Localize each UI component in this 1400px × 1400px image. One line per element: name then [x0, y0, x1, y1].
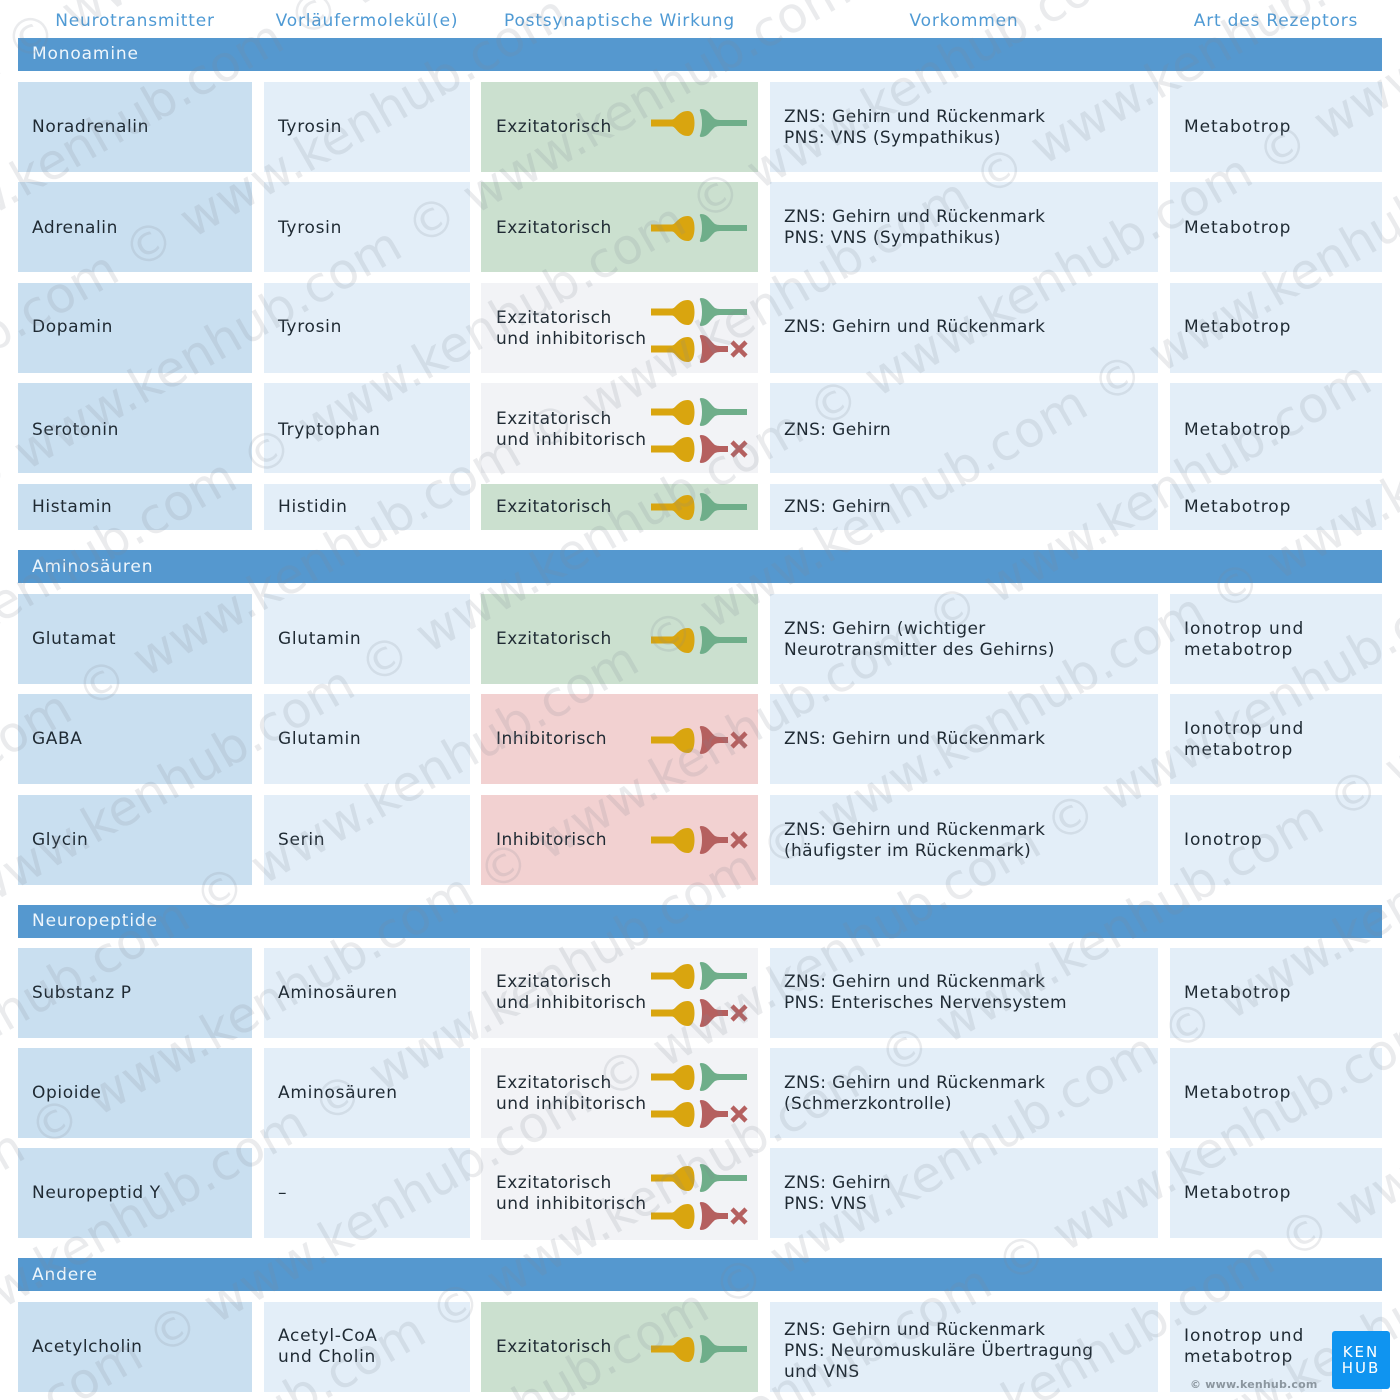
row: Substanz P: ZNS: Gehirn und Rückenmark [784, 972, 1045, 992]
effect: excitatory and inhibitory [481, 1148, 758, 1240]
row: Serotonin: ZNS: Gehirn [784, 420, 891, 440]
row: GABA: Glutamin [278, 728, 361, 748]
effect: excitatory and inhibitory: und inhibitorisch [496, 430, 647, 450]
row: Adrenalin: Tyrosin [278, 218, 342, 238]
row: Glutamat: metabotrop [1184, 640, 1293, 660]
row: Serotonin: Serotonin [32, 420, 119, 440]
row: Serotonin [18, 383, 1382, 473]
row: Serotonin: Metabotrop [1184, 420, 1291, 440]
row: Histamin [18, 484, 1382, 530]
effect: excitatory and inhibitory [481, 1048, 758, 1138]
section band: Monoamine: Monoamine [32, 44, 139, 64]
row: Dopamin: Metabotrop [1184, 316, 1291, 336]
row: Glutamat: Glutamin [278, 628, 361, 648]
effect: excitatory and inhibitory: Exzitatorisch [496, 409, 612, 429]
row: GABA: ZNS: Gehirn und Rückenmark [784, 728, 1045, 748]
effect: excitatory and inhibitory: Exzitatorisch [496, 972, 612, 992]
row: Opioide [18, 1048, 1382, 1138]
effect: inhibitory [481, 694, 758, 784]
row: Opioide: Metabotrop [1184, 1082, 1291, 1102]
row: Substanz P: PNS: Enterisches Nervensystem [784, 993, 1067, 1013]
effect: excitatory and inhibitory: und inhibitorisch [496, 993, 647, 1013]
row: Dopamin: ZNS: Gehirn und Rückenmark [784, 316, 1045, 336]
row: Noradrenalin: Noradrenalin [32, 116, 149, 136]
effect: inhibitory: Inhibitorisch [496, 830, 607, 850]
effect: excitatory [481, 484, 758, 530]
row: Opioide: Opioide [32, 1082, 101, 1102]
copyright note: © www.kenhub.com [1190, 1378, 1318, 1391]
row: GABA: Ionotrop und [1184, 719, 1304, 739]
row: Noradrenalin: PNS: VNS (Sympathikus) [784, 128, 1001, 148]
logo: Kenhub: KEN [1343, 1343, 1379, 1361]
section band: Andere [18, 1258, 1382, 1291]
section band: Monoamine [18, 38, 1382, 71]
row: Serotonin: Tryptophan [278, 420, 381, 440]
column heading: Postsynaptische Wirkung: Postsynaptische Wirkung [504, 11, 735, 31]
row: Substanz P [18, 948, 1382, 1038]
effect: excitatory and inhibitory: und inhibitorisch [496, 329, 647, 349]
effect: inhibitory [481, 795, 758, 885]
row: Histamin: Metabotrop [1184, 496, 1291, 516]
row: Noradrenalin: Metabotrop [1184, 116, 1291, 136]
logo: Kenhub [1332, 1331, 1390, 1389]
row: Glutamat: Glutamat [32, 628, 116, 648]
row: Glutamat: Ionotrop und [1184, 619, 1304, 639]
row: Glycin [18, 795, 1382, 885]
effect: excitatory and inhibitory: Exzitatorisch [496, 1173, 612, 1193]
row: Noradrenalin [18, 82, 1382, 172]
row: GABA: GABA [32, 728, 82, 748]
effect: excitatory [481, 1302, 758, 1392]
row: Acetylcholin: metabotrop [1184, 1347, 1293, 1367]
column heading: Vorläufermolekül(e): Vorläufermolekül(e) [276, 11, 458, 31]
row: Neuropeptid Y: PNS: VNS [784, 1194, 867, 1214]
row: Glutamat [18, 594, 1382, 684]
row: Substanz P: Aminosäuren [278, 982, 398, 1002]
row: Glycin: Ionotrop [1184, 830, 1263, 850]
row: Adrenalin: Metabotrop [1184, 218, 1291, 238]
effect: excitatory and inhibitory [481, 283, 758, 373]
row: Noradrenalin: Tyrosin [278, 116, 342, 136]
section band: Aminosäuren: Aminosäuren [32, 557, 153, 577]
row: Opioide: ZNS: Gehirn und Rückenmark [784, 1073, 1045, 1093]
row: Neuropeptid Y: Neuropeptid Y [32, 1182, 161, 1202]
effect: excitatory [481, 82, 758, 172]
effect: excitatory [481, 182, 758, 272]
row: Dopamin [18, 283, 1382, 373]
row: Neuropeptid Y: – [278, 1182, 287, 1202]
column heading: Art des Rezeptors: Art des Rezeptors [1194, 11, 1358, 31]
effect: excitatory and inhibitory: Exzitatorisch [496, 1073, 612, 1093]
row: Histamin: Histamin [32, 496, 112, 516]
row: Glycin: (häufigster im Rückenmark) [784, 841, 1031, 861]
row: Acetylcholin: ZNS: Gehirn und Rückenmark [784, 1320, 1045, 1340]
row: Noradrenalin: ZNS: Gehirn und Rückenmark [784, 107, 1045, 127]
row: Neuropeptid Y: Metabotrop [1184, 1182, 1291, 1202]
effect: inhibitory: Inhibitorisch [496, 728, 607, 748]
row: Acetylcholin: Acetylcholin [32, 1336, 143, 1356]
row: Adrenalin: ZNS: Gehirn und Rückenmark [784, 207, 1045, 227]
row: Substanz P: Metabotrop [1184, 982, 1291, 1002]
effect: excitatory and inhibitory [481, 383, 758, 473]
row: Opioide: (Schmerzkontrolle) [784, 1094, 952, 1114]
row: Dopamin: Dopamin [32, 316, 113, 336]
row: Histamin: Histidin [278, 496, 348, 516]
effect: excitatory: Exzitatorisch [496, 496, 612, 516]
row: Dopamin: Tyrosin [278, 316, 342, 336]
column heading: Vorkommen: Vorkommen [910, 11, 1018, 31]
row: GABA: metabotrop [1184, 740, 1293, 760]
row: Substanz P: Substanz P [32, 982, 132, 1002]
section band: Aminosäuren [18, 550, 1382, 583]
row: Adrenalin: PNS: VNS (Sympathikus) [784, 228, 1001, 248]
logo: Kenhub: HUB [1342, 1359, 1380, 1377]
row: Neuropeptid Y: ZNS: Gehirn [784, 1173, 891, 1193]
effect: excitatory: Exzitatorisch [496, 628, 612, 648]
row: Glutamat: ZNS: Gehirn (wichtiger [784, 619, 986, 639]
row: Glutamat: Neurotransmitter des Gehirns) [784, 640, 1055, 660]
row: Acetylcholin: Ionotrop und [1184, 1326, 1304, 1346]
effect: excitatory: Exzitatorisch [496, 1336, 612, 1356]
effect: excitatory [481, 594, 758, 684]
row: Opioide: Aminosäuren [278, 1082, 398, 1102]
column heading: Neurotransmitter: Neurotransmitter [55, 11, 215, 31]
row: Adrenalin [18, 182, 1382, 272]
row: Acetylcholin [18, 1302, 1382, 1392]
row: Acetylcholin: und Cholin [278, 1347, 376, 1367]
effect: excitatory and inhibitory: Exzitatorisch [496, 308, 612, 328]
section band: Neuropeptide: Neuropeptide [32, 911, 158, 931]
row: Acetylcholin: Acetyl-CoA [278, 1326, 378, 1346]
effect: excitatory: Exzitatorisch [496, 116, 612, 136]
section band: Andere: Andere [32, 1265, 98, 1285]
row: Glycin: Serin [278, 830, 325, 850]
section band: Neuropeptide [18, 905, 1382, 938]
row: Glycin: Glycin [32, 830, 88, 850]
effect: excitatory and inhibitory [481, 948, 758, 1038]
row: Histamin: ZNS: Gehirn [784, 496, 891, 516]
effect: excitatory: Exzitatorisch [496, 218, 612, 238]
row: Adrenalin: Adrenalin [32, 218, 118, 238]
row: Acetylcholin: und VNS [784, 1362, 860, 1382]
effect: excitatory and inhibitory: und inhibitorisch [496, 1194, 647, 1214]
row: Glycin: ZNS: Gehirn und Rückenmark [784, 820, 1045, 840]
row: GABA [18, 694, 1382, 784]
row: Acetylcholin: PNS: Neuromuskuläre Übertragung [784, 1340, 1093, 1360]
effect: excitatory and inhibitory: und inhibitorisch [496, 1094, 647, 1114]
row: Neuropeptid Y [18, 1148, 1382, 1240]
